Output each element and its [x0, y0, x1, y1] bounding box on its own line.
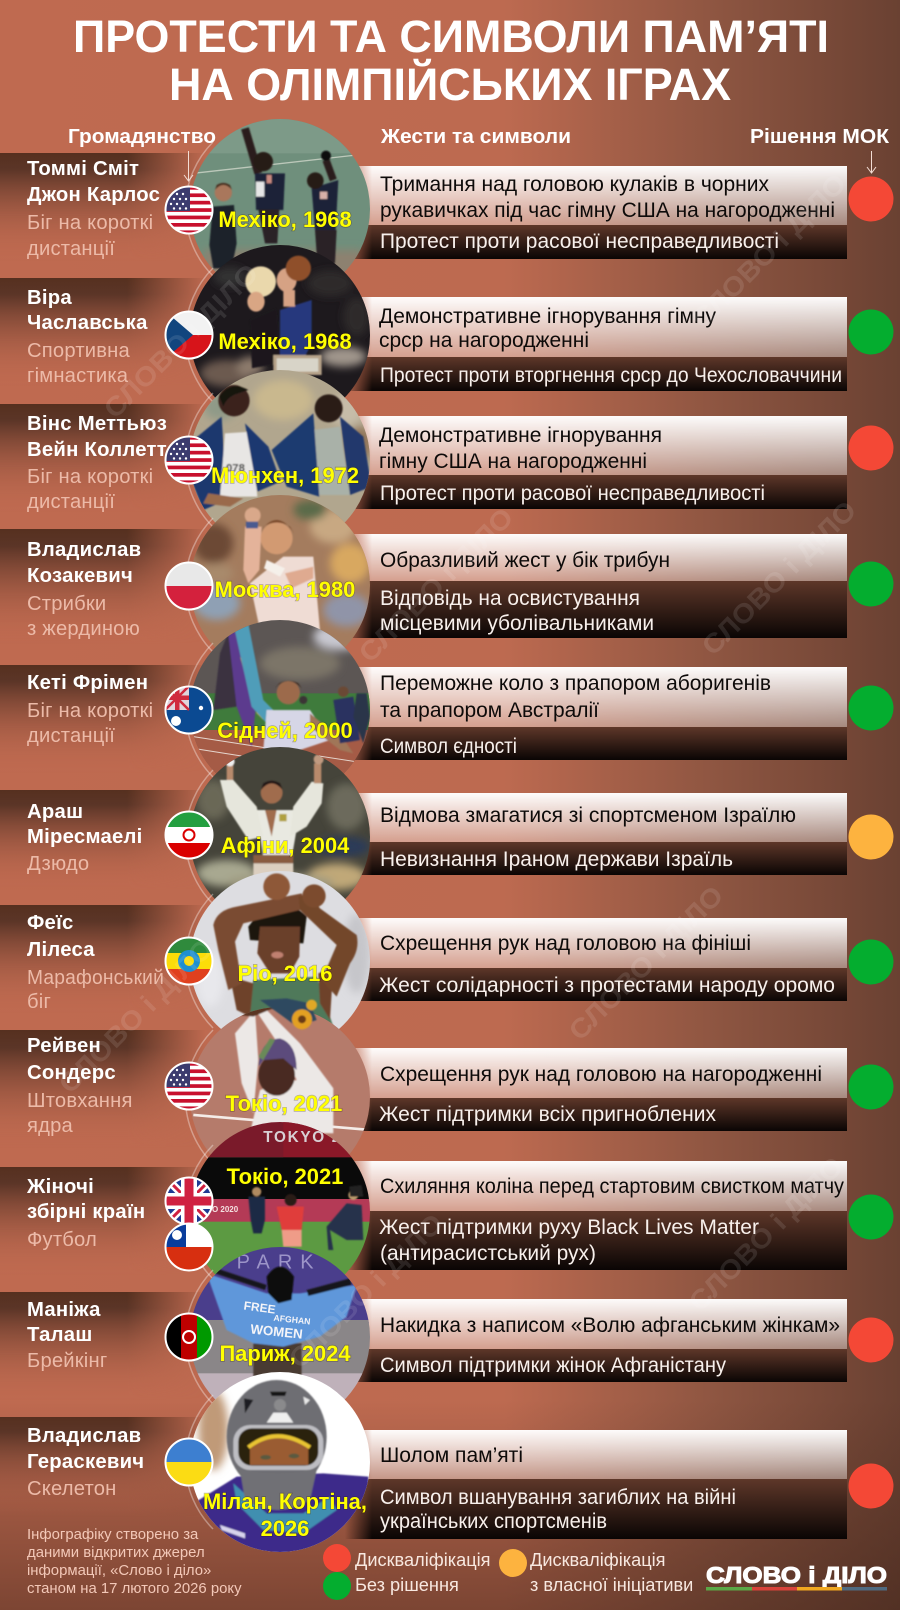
athlete text: Маніжа [27, 1299, 101, 1321]
gesture text [380, 1444, 736, 1533]
label: Токіо, 2021 [227, 1164, 343, 1189]
label: Мехіко, 1968 [218, 329, 352, 354]
legend: з власної ініціативи [530, 1575, 693, 1595]
gesture text: Протест проти расової несправедливості [380, 230, 779, 253]
athlete text: Біг на короткі [27, 700, 153, 722]
ring [185, 393, 213, 527]
column headers [68, 125, 889, 148]
photo: Мехіко 1968 [193, 119, 370, 272]
ring [185, 1145, 213, 1279]
watermarks: СЛОВО і ДІЛО [98, 258, 264, 424]
athlete text [27, 672, 153, 747]
legend [323, 1544, 693, 1600]
band [0, 153, 200, 236]
label: Мілан, Кортіна, [203, 1489, 367, 1514]
athlete text: Дзюдо [27, 853, 89, 875]
source note: інформації, «Слово і діло» [27, 1563, 211, 1579]
athlete text: Лілеса [27, 939, 95, 961]
athlete text: Жіночі [26, 1176, 94, 1198]
athlete text: Вінс Меттьюз [27, 413, 167, 435]
athlete text: дистанції [27, 491, 115, 513]
row 8: Сондерс [0, 997, 894, 1190]
row 4: Козакевич [0, 493, 894, 680]
label: Москва, 1980 [215, 577, 355, 602]
column headers: Рішення МОК [750, 125, 889, 148]
athlete text: гімнастика [27, 365, 129, 387]
athlete text: Міресмаелі [27, 826, 143, 848]
athlete text: Біг на короткі [27, 466, 153, 488]
athlete text: Брейкінг [27, 1350, 107, 1372]
label: Париж, 2024 [219, 1341, 351, 1366]
athlete text: Гераскевич [27, 1451, 144, 1473]
arrow: decision [867, 151, 876, 173]
band [0, 1167, 210, 1275]
athlete text: Спортивна [27, 340, 131, 362]
gesture text [380, 804, 796, 871]
row 11: Гераскевич [0, 1370, 894, 1560]
photo: Мехіко 1968 [193, 245, 370, 398]
gesture text [379, 1063, 822, 1126]
source note [27, 1527, 242, 1597]
source note: даними відкритих джерел [27, 1545, 205, 1561]
flag: Чехословаччина [165, 311, 213, 359]
row 5: Фрімен [0, 617, 894, 803]
label: 2026 [261, 1516, 309, 1541]
decision [848, 426, 894, 470]
decision [848, 1318, 894, 1362]
gesture text: українських спортсменів [380, 1510, 607, 1533]
label [203, 1489, 367, 1541]
band [0, 1292, 210, 1400]
watermarks: СЛОВО і ДІЛО [683, 1151, 849, 1317]
panel: gesture [340, 793, 847, 875]
band [0, 404, 200, 486]
athlete text [27, 1299, 107, 1372]
gesture text: Жест підтримки руху Black Lives Matter [379, 1216, 759, 1239]
decision [848, 940, 894, 984]
decision [848, 686, 894, 730]
athlete text: Віра [27, 287, 72, 309]
gesture text: (антирасистський рух) [380, 1242, 596, 1265]
gesture text: Схиляння коліна перед стартовим свистком матчу [380, 1175, 844, 1198]
watermarks: СЛОВО і ДІЛО [563, 880, 729, 1046]
label: Мюнхен, 1972 [211, 463, 359, 488]
flag: США [165, 186, 213, 234]
flag: Велика Британія [165, 1177, 213, 1225]
gesture text: гімну США на нагородженні [379, 450, 647, 473]
panel: gesture [340, 667, 847, 760]
athlete text: Рейвен [27, 1035, 101, 1057]
flag: США [165, 436, 213, 484]
gesture text: Символ підтримки жінок Афганістану [380, 1354, 726, 1377]
row 1: Сміт і Карлос [0, 113, 894, 300]
gesture text: Невизнання Іраном держави Ізраїль [380, 848, 733, 871]
gesture text: Демонстративне ігнорування гімну [379, 305, 716, 328]
athlete text: Араш [27, 801, 83, 823]
athlete text [27, 287, 148, 387]
gesture text: Тримання над головою кулаків в чорних [380, 173, 769, 196]
athlete text [27, 801, 143, 875]
gesture text: місцевими уболівальниками [380, 612, 654, 635]
gesture text: Відмова змагатися зі спортсменом Ізраїлю [380, 804, 796, 827]
ring [185, 142, 213, 276]
photo: Париж 2024: AFGHAN [273, 1313, 311, 1327]
panel: gesture [340, 166, 847, 259]
title [73, 11, 829, 110]
title: ПРОТЕСТИ ТА СИМВОЛИ ПАМ’ЯТІ [73, 11, 829, 62]
athlete text: Козакевич [27, 565, 133, 587]
gesture text: Жест підтримки всіх пригноблених [379, 1103, 716, 1126]
panel: gesture [340, 416, 847, 509]
panel: gesture [340, 534, 847, 638]
row 7: Лілеса [0, 870, 894, 1057]
photo: Мюнхен 1972: 078 [226, 463, 245, 475]
row 6: Міресмаелі [0, 743, 894, 930]
flag: Чилі [165, 1223, 213, 1271]
athlete text: Томмі Сміт [27, 158, 139, 180]
gesture text: Символ вшанування загиблих на війні [380, 1486, 736, 1509]
athlete text: збірні країн [27, 1201, 145, 1223]
athlete text: Джон Карлос [27, 184, 160, 206]
row 10: Талаш [0, 1243, 894, 1430]
photo: Ріо 2016 [193, 871, 370, 1029]
label: Афіни, 2004 [221, 833, 350, 858]
athlete text: ядра [27, 1115, 74, 1137]
photo: Токіо 2021 футбол: YO 2020 [207, 1205, 239, 1214]
athlete text: Феїс [27, 912, 74, 934]
row 9: Жіночі збірні [0, 1120, 894, 1308]
gesture text: Шолом пам’яті [380, 1444, 523, 1467]
row 3: Меттьюз і Коллетт [0, 370, 894, 557]
label: Сідней, 2000 [217, 718, 353, 743]
ring [185, 518, 213, 652]
ring [185, 1395, 213, 1529]
watermarks [53, 168, 862, 1374]
athlete text: Сондерс [27, 1062, 116, 1084]
arrow: citizenship [184, 151, 193, 181]
band [0, 1030, 210, 1148]
photo: Токіо 2021 футбол: TOKYO 2 [263, 1129, 342, 1146]
photo: Мюнхен 1972 [193, 370, 370, 522]
legend: Дискваліфікація [355, 1550, 491, 1570]
athlete text [27, 413, 167, 513]
photo: Сідней 2000 [193, 620, 370, 774]
flag: США [165, 1062, 213, 1110]
gesture text: срср на нагородженні [379, 329, 589, 352]
watermarks: СЛОВО і ДІЛО [353, 502, 519, 668]
band [0, 665, 200, 748]
gesture text: Переможне коло з прапором аборигенів [380, 672, 771, 695]
photo: Париж 2024 [187, 1243, 373, 1430]
athlete text [26, 1176, 145, 1251]
flag: Іран [165, 811, 213, 859]
gesture text [380, 1314, 840, 1377]
legend: Дискваліфікація [530, 1550, 666, 1570]
athlete text: Марафонський [27, 967, 164, 989]
column headers: Громадянство [68, 125, 216, 148]
gesture text: Протест проти расової несправедливості [380, 482, 765, 505]
panel: gesture [340, 1048, 847, 1131]
gesture text [379, 424, 765, 505]
athlete text: Штовхання [27, 1090, 133, 1112]
photo: Париж 2024: PARK [237, 1251, 322, 1273]
watermarks: СЛОВО і ДІЛО [696, 495, 862, 661]
athlete text [27, 539, 141, 640]
flag: Афганістан [165, 1313, 213, 1361]
band [0, 790, 200, 866]
photo: Париж 2024: FREE [243, 1298, 276, 1317]
watermarks: СЛОВО і ДІЛО [686, 168, 852, 334]
logo: СЛОВО і ДІЛО [706, 1562, 887, 1588]
flag: Ефіопія [165, 937, 213, 985]
source note: Інфографіку створено за [27, 1527, 199, 1543]
flag: Україна [165, 1438, 213, 1486]
athlete text: з жердиною [27, 618, 140, 640]
ring [185, 770, 213, 904]
column headers: Жести та символи [380, 125, 571, 148]
athlete text [27, 1035, 133, 1137]
athlete text: Чаславська [27, 312, 148, 334]
gesture text [379, 305, 842, 387]
band [0, 278, 200, 360]
gesture text: Демонстративне ігнорування [379, 424, 662, 447]
ring [185, 643, 213, 777]
athlete text [27, 1425, 144, 1500]
athlete text: дистанції [27, 238, 115, 260]
photo: Токіо 2021 футбол [187, 1120, 373, 1308]
photo: Париж 2024: WOMEN [250, 1321, 304, 1342]
row 2: Чаславська [0, 240, 894, 407]
panel: gesture [340, 1161, 847, 1270]
watermarks: СЛОВО і ДІЛО [283, 1208, 449, 1374]
band [0, 1417, 210, 1517]
flag: Австралія [165, 686, 213, 734]
gesture text: Відповідь на освистування [380, 587, 640, 610]
gesture text: рукавичках під час гімну США на нагородженні [380, 199, 835, 222]
panel: gesture [340, 1299, 847, 1382]
ring [185, 894, 213, 1028]
watermarks: СЛОВО і ДІЛО [53, 933, 219, 1099]
gesture text: Образливий жест у бік трибун [380, 549, 670, 572]
athlete text [27, 158, 160, 260]
athlete text: Футбол [27, 1229, 97, 1251]
gesture text: Накидка з написом «Волю афганським жінкам» [380, 1314, 840, 1337]
panel: gesture [340, 918, 847, 1001]
athlete text: Кеті Фрімен [27, 672, 148, 694]
gesture text [379, 1175, 844, 1265]
ring [185, 1030, 213, 1164]
gesture text: Жест солідарності з протестами народу оромо [379, 974, 835, 997]
gesture text: Схрещення рук над головою на фініші [380, 932, 751, 955]
title: НА ОЛІМПІЙСЬКИХ ІГРАХ [169, 58, 731, 110]
decision [848, 176, 894, 222]
athlete text: Владислав [27, 539, 141, 561]
band [0, 905, 200, 988]
gesture text: Символ єдності [380, 735, 517, 758]
legend: Без рішення [355, 1575, 459, 1595]
athlete text: Владислав [27, 1425, 141, 1447]
ring [185, 268, 213, 402]
athlete text: Талаш [27, 1324, 92, 1346]
panel: gesture [340, 297, 847, 391]
label: Токіо, 2021 [226, 1091, 342, 1116]
photo: Токіо 2021 [183, 997, 383, 1190]
athlete text: Стрибки [27, 593, 106, 615]
gesture text: Схрещення рук над головою на нагородженні [380, 1063, 822, 1086]
gesture text [380, 549, 670, 635]
athlete text: біг [27, 991, 51, 1013]
panel: gesture [340, 1430, 847, 1539]
bouquet [260, 998, 317, 1029]
gesture text: Протест проти вторгнення срср до Чехословаччини [380, 364, 842, 387]
decision [848, 310, 894, 354]
decision [848, 1464, 894, 1508]
decision [848, 1064, 894, 1110]
gesture text: та прапором Австралії [380, 699, 599, 722]
decision [848, 1194, 894, 1240]
decision [848, 814, 894, 860]
gesture text [379, 932, 835, 997]
athlete text: дистанції [27, 725, 115, 747]
photo: Мілан, Кортіна 2026 [187, 1370, 373, 1560]
athlete text: Біг на короткі [27, 212, 153, 234]
decision [848, 562, 894, 606]
band [0, 529, 200, 618]
athlete text: Скелетон [27, 1478, 117, 1500]
flag: Польща [165, 562, 213, 610]
label: Мехіко, 1968 [218, 207, 352, 232]
athlete text [27, 912, 164, 1013]
photo: Афіни 2004 [192, 747, 370, 899]
gesture text [380, 672, 771, 758]
ring [185, 1270, 213, 1404]
label: Ріо, 2016 [238, 961, 332, 986]
athlete text: Вейн Коллетт [27, 439, 167, 461]
source note: станом на 17 лютого 2026 року [27, 1581, 242, 1597]
photo: Москва 1980 [193, 495, 370, 648]
gesture text [380, 173, 835, 253]
